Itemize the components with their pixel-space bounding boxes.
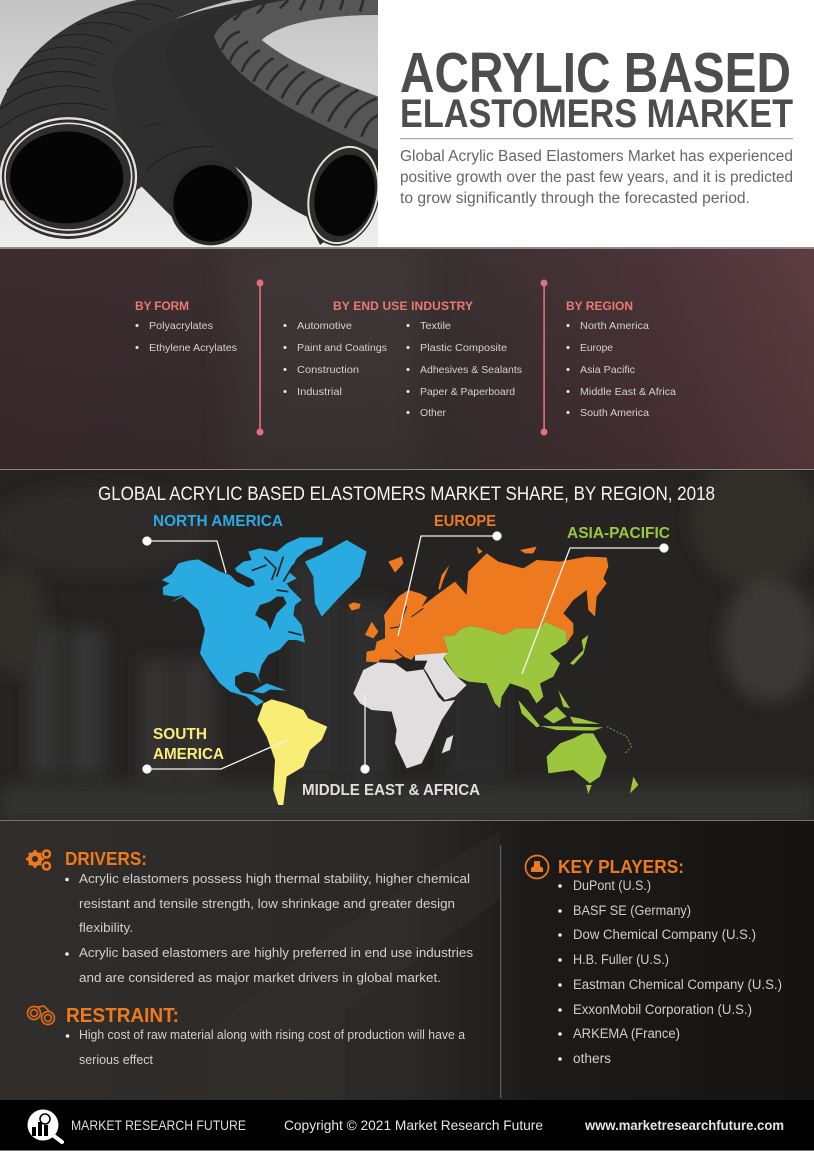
connector: Europe [398, 532, 501, 636]
by end use industry column: Paper & Paperboard [420, 386, 515, 398]
connector: Middle East and Africa [361, 694, 369, 773]
by region column: Middle East & Africa [580, 386, 676, 398]
drivers list: Acrylic based elastomers are highly preferred in end use industries [79, 945, 474, 960]
by region column: South America [580, 407, 649, 419]
world map: Middle East and Africa [353, 653, 467, 768]
front hose body [165, 0, 378, 245]
drivers list: resistant and tensile strength, low shrinkage and greater design [79, 896, 455, 911]
footer bar [0, 1100, 814, 1151]
middle hose body [113, 0, 287, 245]
key players list: Eastman Chemical Company (U.S.) [573, 977, 782, 992]
label: North America: NORTH AMERICA [153, 513, 283, 530]
label: South America [153, 726, 224, 763]
key players heading: KEY PLAYERS: [558, 857, 684, 877]
by region column: North America [580, 320, 649, 332]
ribbed back hose [213, 0, 378, 150]
restraint list: High cost of raw material along with rising cost of production will have a [79, 1028, 465, 1042]
brand name: MARKET RESEARCH FUTURE [71, 1117, 246, 1133]
world map: South America [257, 699, 327, 805]
key players list: H.B. Fuller (U.S.) [573, 952, 669, 967]
key players list: ARKEMA (France) [573, 1026, 680, 1041]
copyright: Copyright © 2021 Market Research Future [284, 1117, 543, 1133]
left hose body [0, 0, 232, 201]
label: South America: SOUTH [153, 726, 207, 743]
by form column [135, 299, 237, 354]
label: Middle East and Africa: MIDDLE EAST & AFRICA [302, 782, 480, 799]
by region column: Asia Pacific [580, 364, 635, 376]
connector: South America [143, 740, 287, 773]
world map: North America [155, 537, 367, 706]
map heading: GLOBAL ACRYLIC BASED ELASTOMERS MARKET SHARE, BY REGION, 2018 [98, 484, 715, 505]
restraint list: serious effect [79, 1053, 154, 1067]
middle hose opening [169, 160, 252, 245]
key players list: DuPont (U.S.) [573, 878, 651, 893]
restraint list [66, 1028, 465, 1067]
drivers list [65, 871, 474, 985]
key players list: ExxonMobil Corporation (U.S.) [573, 1002, 752, 1017]
panel: regional map [0, 455, 814, 825]
intro paragraph: Global Acrylic Based Elastomers Market has experienced [400, 148, 793, 165]
connector: North America [143, 537, 226, 573]
key players list: others [573, 1051, 611, 1066]
by end use industry column: Industrial [297, 386, 342, 398]
left hose opening [0, 114, 138, 239]
icon: gears [26, 850, 50, 870]
drivers list: and are considered as major market drivers in global market. [79, 970, 441, 985]
by end use industry column: Construction [297, 364, 359, 376]
intro paragraph: positive growth over the past few years, and it is predicted [400, 169, 793, 186]
by end use industry column: Plastic Composite [420, 342, 507, 354]
restraint heading: RESTRAINT: [66, 1005, 179, 1027]
connector: Asia-Pacific [522, 544, 668, 674]
icon: handcuffs [28, 1006, 54, 1024]
by region column: BY REGION [566, 299, 633, 313]
icon: logo [28, 1110, 62, 1142]
icon: key players [526, 856, 548, 878]
intro paragraph [400, 148, 793, 207]
key players list: BASF SE (Germany) [573, 903, 691, 918]
intro paragraph: to grow significantly through the forecasted period. [400, 190, 750, 207]
label: Europe: EUROPE [434, 513, 496, 530]
world map: Asia Pacific [443, 622, 638, 794]
by end use industry column: Textile [420, 320, 451, 332]
key players list [558, 878, 782, 1066]
drivers heading: DRIVERS: [65, 849, 147, 869]
by form column: Polyacrylates [149, 320, 213, 332]
by region column [566, 299, 676, 419]
by end use industry column: Paint and Coatings [297, 342, 387, 354]
world map: Europe and Russia [348, 547, 608, 662]
website: www.marketresearchfuture.com [584, 1117, 784, 1133]
by end use industry column [284, 299, 522, 419]
right hose opening [307, 146, 378, 246]
panel: market segmentation [0, 247, 814, 471]
by form column: BY FORM [135, 299, 189, 313]
hero photo: rubber hoses [0, 0, 391, 254]
by end use industry column: Adhesives & Sealants [420, 364, 522, 376]
by end use industry column: Other [420, 407, 446, 419]
by end use industry column: Automotive [297, 320, 352, 332]
divider with end dots [540, 280, 548, 436]
label: South America: AMERICA [153, 746, 224, 763]
title [400, 41, 793, 136]
label: Asia-Pacific: ASIA-PACIFIC [567, 525, 670, 542]
divider with end dots [256, 280, 264, 436]
panel: drivers, restraint and key players [0, 820, 814, 1100]
drivers list: Acrylic elastomers possess high thermal stability, higher chemical [79, 871, 470, 886]
by region column: Europe [580, 342, 613, 354]
by end use industry column: BY END USE INDUSTRY [333, 299, 473, 313]
drivers list: flexibility. [79, 920, 133, 935]
key players list: Dow Chemical Company (U.S.) [573, 927, 756, 942]
by form column: Ethylene Acrylates [149, 342, 237, 354]
